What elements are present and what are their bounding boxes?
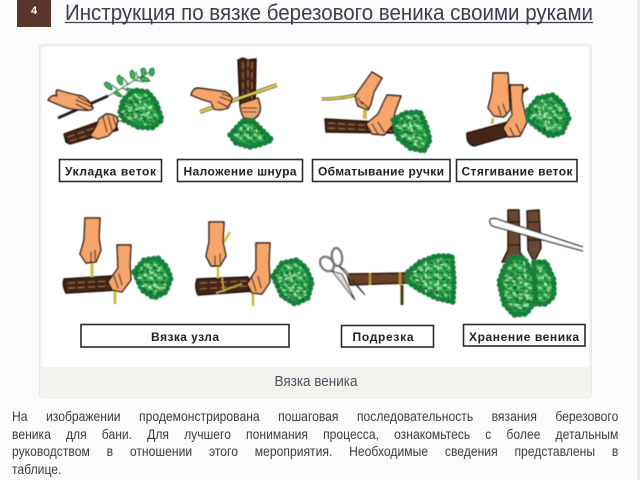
label: Укладка веток xyxy=(60,160,162,182)
title: Инструкция по вязке березового веника своими руками xyxy=(65,0,593,25)
step: Наложение шнура xyxy=(191,58,277,147)
label: Хранение веника xyxy=(464,324,585,346)
step: Вязка узла, first stage xyxy=(63,218,171,304)
step: Вязка узла, second stage xyxy=(196,222,312,306)
label: Хранение веника: Хранение веника xyxy=(469,330,579,344)
label: Наложение шнура xyxy=(178,160,302,182)
label: Стягивание веток xyxy=(456,160,577,182)
panel: figure with caption xyxy=(39,44,592,398)
body text: руководством в отношении этого мероприятия. Необходимые сведения представлены в xyxy=(12,444,618,459)
label: Укладка веток: Укладка веток xyxy=(65,164,157,178)
body text: На изображении продемонстрирована пошаговая последовательность вязания березового xyxy=(12,409,618,424)
body text: таблице. xyxy=(12,462,61,477)
step: Обматывание ручки xyxy=(322,72,430,151)
label: Вязка узла: Вязка узла xyxy=(151,330,219,344)
number badge xyxy=(17,0,51,27)
body text xyxy=(12,409,618,477)
body text: веника для бани. Для лучшего понимания процесса, ознакомьтесь с более детальным xyxy=(12,427,618,442)
step: Стягивание веток xyxy=(467,73,569,146)
panel: figure with caption: Вязка веника xyxy=(274,374,358,390)
number badge: 4 xyxy=(31,5,37,17)
step: Укладка веток xyxy=(48,68,162,144)
label: Вязка узла xyxy=(81,324,289,347)
label: Обматывание ручки: Обматывание ручки xyxy=(318,164,444,178)
label: Обматывание ручки xyxy=(312,160,450,182)
step: Хранение веника xyxy=(490,210,583,315)
label: Наложение шнура: Наложение шнура xyxy=(184,164,297,178)
label: Стягивание веток: Стягивание веток xyxy=(462,164,573,178)
label: Подрезка: Подрезка xyxy=(352,330,414,344)
label: Подрезка xyxy=(342,326,434,347)
step: Подрезка xyxy=(317,247,454,305)
